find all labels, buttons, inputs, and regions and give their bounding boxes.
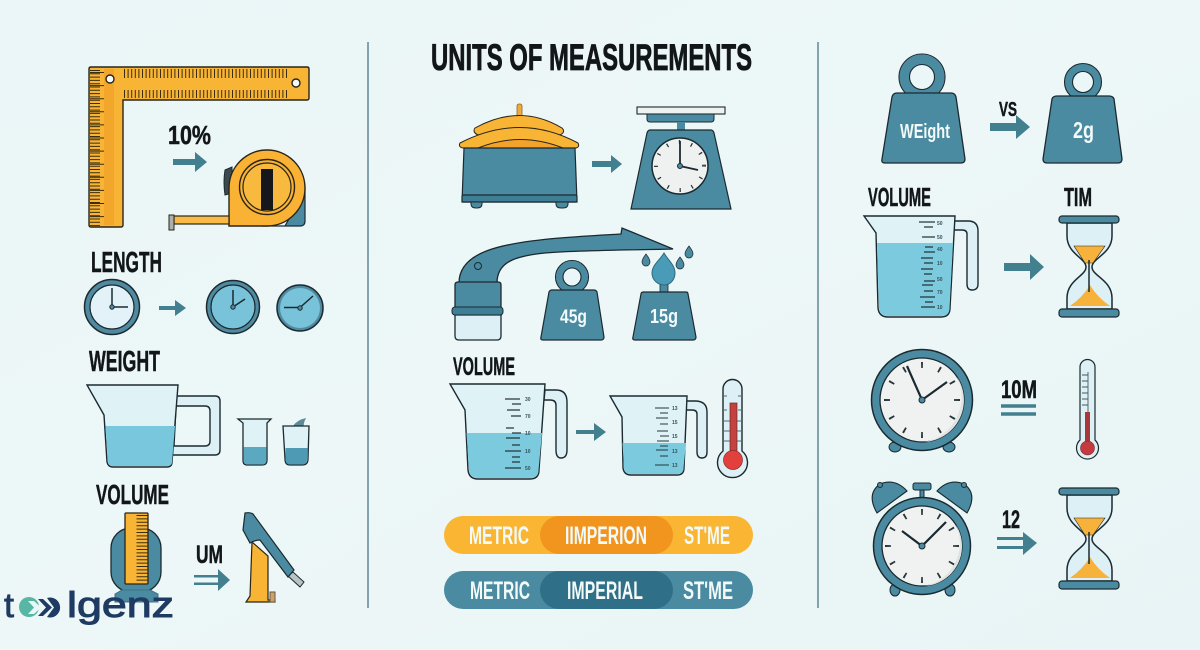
- icon: thermometer: [718, 380, 748, 478]
- label: VS: VS: [999, 99, 1017, 121]
- pill: teal comparison: ST'ME: [683, 577, 733, 605]
- icon: measuring jug large: 30: [525, 397, 531, 403]
- pill: teal comparison: METRIC: [470, 577, 530, 605]
- icon: measuring jug full: 50: [937, 277, 943, 283]
- icon: weight 15g with drop: 15g: [650, 306, 678, 328]
- icon: weight 2g: [1043, 64, 1122, 163]
- arrow: [592, 155, 622, 173]
- title: UNITS OF MEASUREMENTS: [431, 37, 752, 78]
- heading: time: TIM: [1064, 182, 1092, 212]
- logo: [4, 584, 174, 625]
- icon: hourglass lower: [1059, 488, 1119, 589]
- equals lines: [1001, 406, 1036, 414]
- icon: measuring jug full: 50: [937, 221, 943, 227]
- icon: tape measure: [169, 150, 305, 230]
- icon: measuring jug small: [610, 396, 707, 475]
- pill: teal comparison: IMPERIAL: [567, 577, 643, 605]
- icon: measuring jug large: 50: [525, 466, 531, 472]
- icon: measuring jug: [87, 385, 220, 467]
- icon: measuring jug small: 15: [672, 434, 678, 440]
- icon: weight 2g: 2g: [1073, 117, 1094, 143]
- heading: length: LENGTH: [91, 247, 162, 279]
- icon: kitchen scale with dial: [631, 107, 731, 209]
- icon: measuring jug large: [450, 384, 567, 479]
- arrow: double: [194, 569, 230, 591]
- icon: weight 15g with drop: [633, 253, 696, 340]
- heading: weight: WEIGHT: [89, 346, 160, 378]
- icon: alarm clock: [872, 482, 972, 596]
- pill: yellow comparison: IIMPERION: [565, 522, 647, 550]
- icon: small beaker: [238, 419, 271, 465]
- heading: volume: VOLUME: [96, 479, 169, 510]
- icon: measuring jug large: 10: [525, 431, 531, 437]
- icon: capsule with ruler: [111, 513, 161, 602]
- arrow: [1004, 254, 1044, 280]
- pill: yellow comparison: [444, 516, 753, 554]
- arrow: [159, 300, 186, 316]
- heading: volume: VOLUME: [868, 182, 931, 212]
- arrow: [576, 423, 606, 441]
- label: 10%: 10%: [168, 120, 211, 150]
- logo: lgenz: [67, 584, 174, 625]
- icon: thin thermometer: [1077, 360, 1099, 459]
- icon: clock 2: [206, 280, 260, 334]
- label: 10M: 10M: [1001, 376, 1037, 404]
- icon: measuring jug full: 70: [937, 290, 943, 296]
- pill: yellow comparison: ST'ME: [684, 522, 730, 550]
- icon: droplets: [642, 246, 693, 269]
- icon: weight labelled Weight: [882, 54, 965, 163]
- icon: clock 3: [277, 285, 323, 331]
- icon: measuring jug small: 13: [672, 406, 678, 412]
- arrow: double: [997, 532, 1037, 555]
- icon: measuring jug full: 40: [937, 247, 943, 253]
- icon: measuring jug small: 15: [672, 420, 678, 426]
- arrow: [173, 152, 207, 172]
- icon: hourglass: [1059, 216, 1119, 317]
- icon: measuring jug large: 10: [525, 449, 531, 455]
- icon: measuring jug full: 10: [937, 261, 943, 267]
- icon: measuring jug small: 13: [672, 463, 678, 469]
- logo: t: [4, 587, 15, 625]
- heading: volume: VOLUME: [453, 353, 515, 381]
- icon: carpenter square ruler: [89, 67, 309, 227]
- icon: weight 45g: [541, 260, 604, 340]
- panel: left column: [4, 67, 323, 625]
- panel: right column: [864, 54, 1122, 596]
- pill: yellow comparison: METRIC: [469, 522, 529, 550]
- icon: measuring jug large: 70: [525, 414, 531, 420]
- panel: center column: [444, 104, 753, 609]
- icon: pot with lid: [459, 104, 579, 208]
- icon: measuring jug full: 50: [937, 235, 943, 241]
- icon: measuring jug full: 10: [937, 305, 943, 311]
- label: UM: UM: [196, 541, 223, 569]
- icon: measuring jug small: 13: [672, 449, 678, 455]
- icon: clock 1: [84, 280, 140, 334]
- icon: faucet arrow: [452, 228, 673, 340]
- icon: clock large: [872, 350, 972, 452]
- icon: weight 45g: 45g: [560, 307, 587, 328]
- pill: teal comparison: [444, 571, 753, 609]
- icon: hammer tool: [243, 513, 304, 602]
- icon: small cup: [283, 418, 309, 465]
- label: 12: 12: [1002, 506, 1020, 534]
- icon: weight labelled Weight: WEight: [900, 121, 950, 143]
- arrow: [990, 115, 1030, 139]
- icon: measuring jug full: [864, 216, 978, 317]
